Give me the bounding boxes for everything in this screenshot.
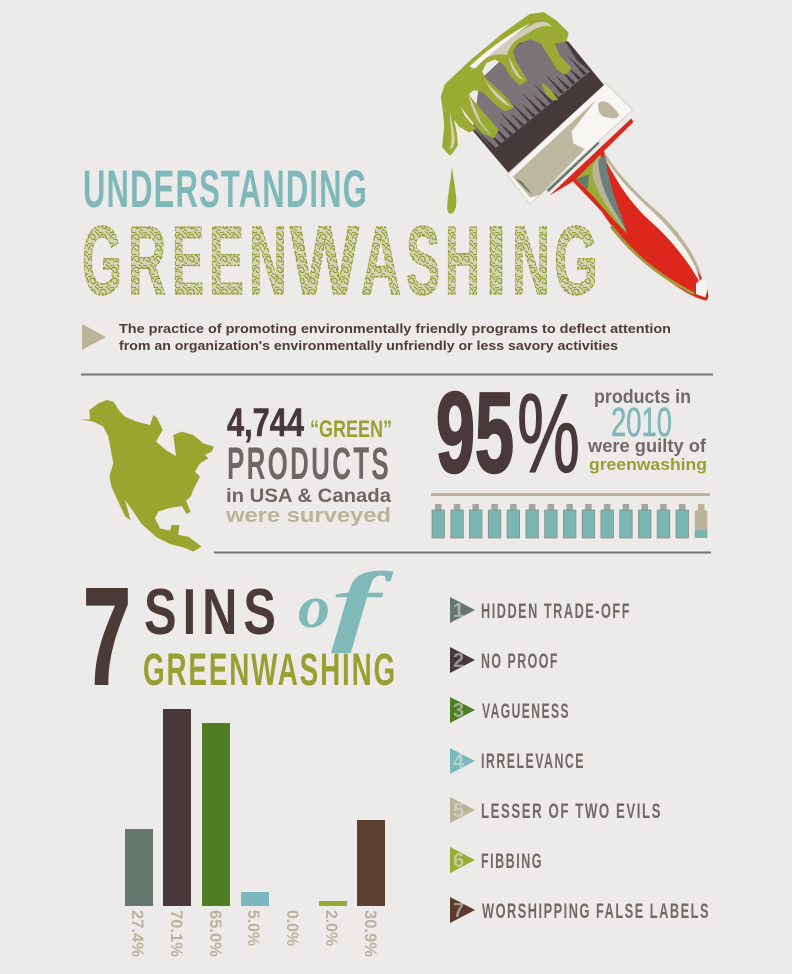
brush ferrule — [507, 83, 633, 204]
bar: 27.4% — [125, 829, 153, 906]
title: Greenwashing floral lettering: G — [554, 206, 598, 315]
bar: 30.9% — [357, 820, 385, 906]
brush bristles — [473, 33, 604, 173]
pictogram: 15 product bottles — [432, 504, 707, 538]
stat: 4,744 green products surveyed: PRODUCTS — [227, 438, 391, 489]
stat: 4,744 green products surveyed: 4,744 — [227, 401, 305, 445]
stat caption: products in 2010 were guilty of greenwashing: 2010 — [611, 399, 672, 445]
sin 1 — [450, 597, 631, 623]
sin 5 — [450, 797, 662, 823]
falling paint drop — [447, 167, 456, 214]
sin 5: LESSER OF TWO EVILS — [481, 800, 662, 823]
sin 4: 4 — [453, 751, 465, 773]
stat caption: products in 2010 were guilty of greenwashing: greenwashing — [589, 455, 707, 474]
sin 6 — [450, 847, 543, 873]
sin 2: 2 — [453, 650, 464, 672]
stat caption: products in 2010 were guilty of greenwashing: were guilty of — [587, 435, 707, 456]
sin 3: VAGUENESS — [482, 700, 570, 723]
value labels: 70.1% — [167, 910, 186, 957]
title: Greenwashing floral lettering: W — [290, 206, 359, 315]
heading: 7 sins of greenwashing: GREENWASHING — [143, 644, 397, 695]
heading: 7 sins of greenwashing: o — [298, 574, 330, 640]
stat: 95 percent: 95 — [436, 370, 514, 497]
title: Greenwashing floral lettering: S — [406, 206, 440, 315]
sin 2 — [450, 647, 559, 673]
illustration: paint brush with dripping green paint — [443, 14, 708, 301]
bar: 2.0% — [319, 901, 347, 906]
sin 3 — [450, 697, 570, 723]
sin 1: HIDDEN TRADE-OFF — [481, 600, 631, 623]
title: Greenwashing floral lettering: R — [128, 206, 166, 315]
title: Greenwashing floral lettering: A — [361, 206, 401, 315]
map: North America — [80, 400, 214, 552]
sin 6: FIBBING — [481, 850, 543, 873]
stat caption: products in 2010 were guilty of greenwashing: products in — [594, 387, 691, 408]
title: Greenwashing floral lettering: H — [445, 206, 480, 315]
sin 7: 7 — [453, 900, 464, 922]
bar chart: sins prevalence — [125, 709, 385, 957]
heading: 7 sins of greenwashing: 7 — [83, 560, 131, 714]
definition text: The practice of promoting environmentally friendly programs to deflect attention — [119, 321, 671, 336]
brush handle — [572, 150, 708, 301]
value labels: 2.0% — [322, 910, 341, 946]
value labels: 0.0% — [283, 910, 302, 946]
title: Greenwashing floral lettering: I — [485, 206, 507, 315]
title: Greenwashing floral lettering: N — [249, 206, 287, 315]
title: Greenwashing floral lettering: G — [82, 206, 122, 315]
icon: definition arrow — [82, 324, 106, 350]
sin 1: 1 — [453, 600, 464, 622]
stat: 4,744 green products surveyed: were surveyed — [225, 505, 391, 527]
heading: 7 sins of greenwashing: SINS — [144, 575, 282, 648]
title: Greenwashing floral lettering: E — [209, 206, 244, 315]
title: Greenwashing floral lettering: N — [512, 206, 550, 315]
stat: 4,744 green products surveyed: “GREEN” — [310, 416, 392, 443]
red rim behind ferrule — [549, 118, 633, 196]
stat: 4,744 green products surveyed: in USA & Canada — [226, 486, 391, 507]
stat: 95 percent: % — [517, 371, 580, 496]
sin 4: IRRELEVANCE — [481, 750, 585, 773]
title: Greenwashing floral lettering: E — [172, 206, 204, 315]
sin 2: NO PROOF — [481, 650, 559, 673]
heading: 7 sins of greenwashing: f — [331, 555, 394, 654]
bar: 70.1% — [163, 709, 191, 906]
definition text — [119, 321, 671, 353]
stat caption: products in 2010 were guilty of greenwashing — [587, 387, 707, 474]
list: the seven sins — [450, 597, 710, 923]
value labels: 30.9% — [361, 910, 380, 957]
value labels: 5.0% — [244, 910, 263, 946]
sin 6: 6 — [453, 850, 464, 872]
sin 7 — [450, 897, 710, 923]
sin 3: 3 — [453, 700, 464, 722]
title: Greenwashing floral lettering — [82, 206, 598, 315]
value labels: 27.4% — [128, 910, 147, 957]
value labels: 65.0% — [206, 910, 225, 957]
sin 4 — [450, 748, 585, 774]
bar: 65.0% — [202, 723, 230, 906]
sin 5: 5 — [453, 800, 464, 822]
definition text: from an organization's environmentally unfriendly or less savory activities — [119, 338, 618, 353]
heading: 7 sins of greenwashing — [83, 555, 397, 714]
stat: 4,744 green products surveyed — [225, 401, 392, 527]
green paint dripping over the bristles — [443, 14, 569, 153]
value labels — [128, 910, 380, 957]
title: Understanding: UNDERSTANDING — [83, 160, 368, 219]
bar: 5.0% — [241, 892, 269, 906]
